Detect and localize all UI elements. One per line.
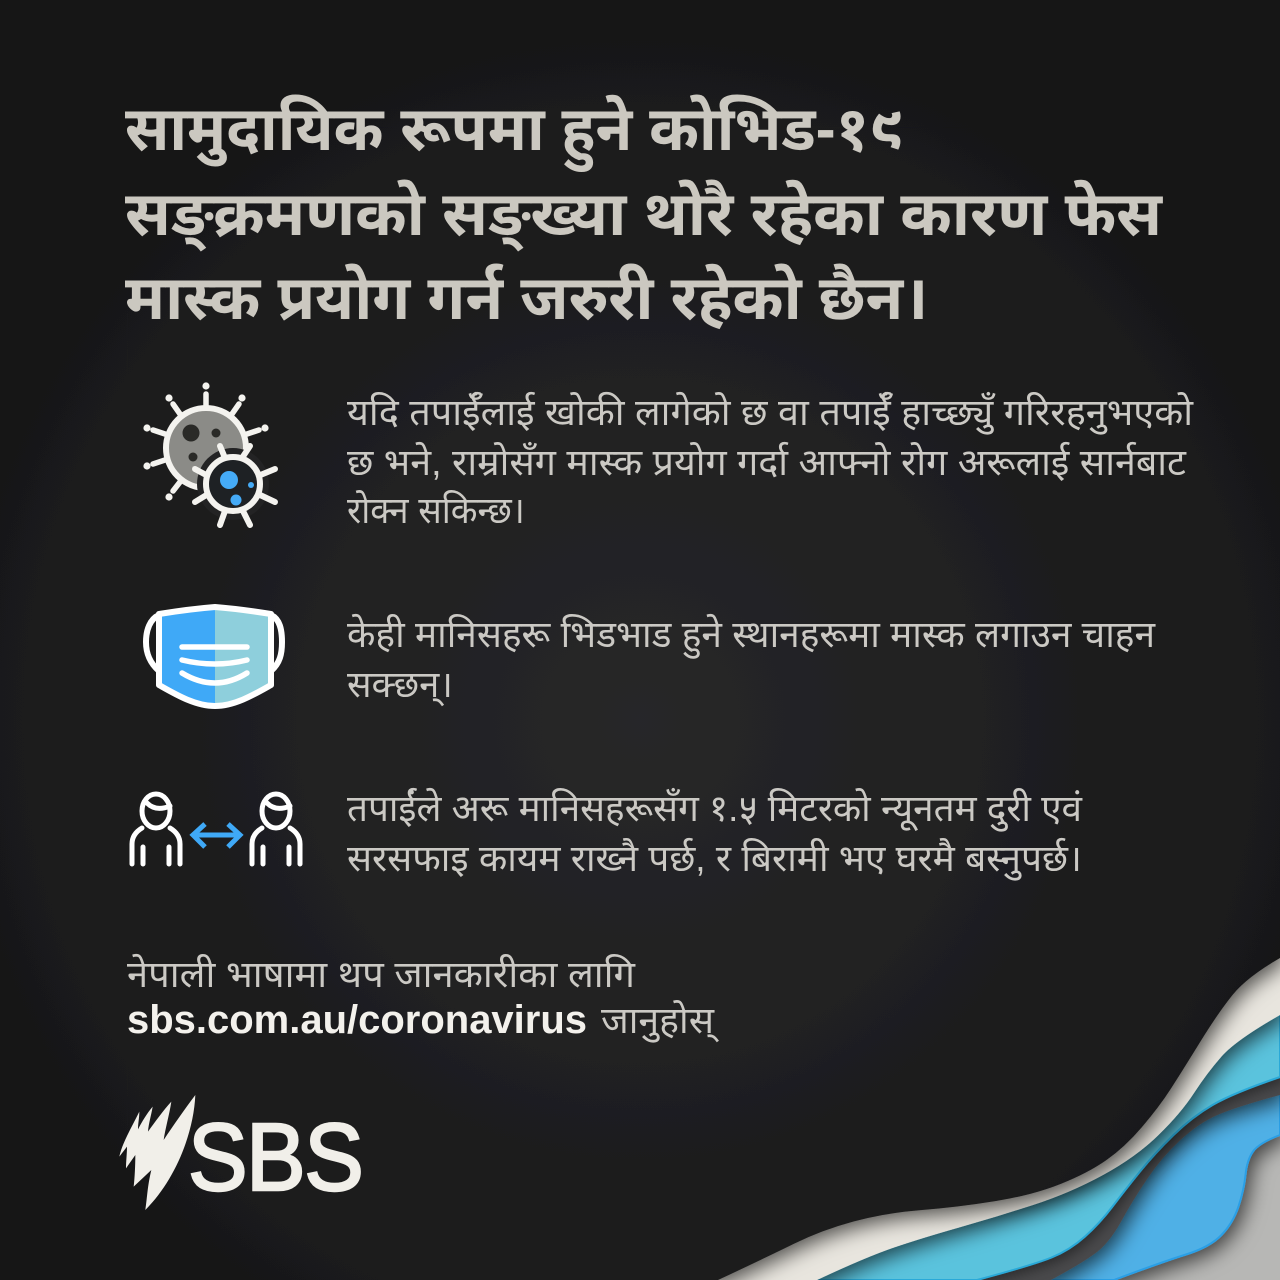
title: मास्क प्रयोग गर्न जरुरी रहेको छैन। xyxy=(125,262,928,333)
icon: two viruses xyxy=(143,382,275,525)
text block: coughing advice: यदि तपाईँलाई खोकी लागेको छ वा तपाईँ हाच्छ्युँ गरिरहनुभएको xyxy=(347,391,1194,435)
text block: coughing advice: छ भने, राम्रोसँग मास्क प्रयोग गर्दा आफ्नो रोग अरूलाई सार्नबाट xyxy=(347,441,1187,483)
text block: distancing and hygiene: सरसफाइ कायम राख्नै पर्छ, र बिरामी भए घरमै बस्नुपर्छ। xyxy=(347,837,1082,881)
icon: face mask xyxy=(146,607,282,708)
text block: crowded places xyxy=(347,614,1156,707)
title: सामुदायिक रूपमा हुने कोभिड-१९ xyxy=(125,93,903,173)
footer: more information: जानुहोस् xyxy=(601,1000,719,1043)
logo: SBS xyxy=(119,1095,362,1211)
text block: distancing and hygiene xyxy=(347,787,1083,881)
icon: two people keeping distance xyxy=(132,794,300,864)
text block: distancing and hygiene: तपाईंले अरू मानिसहरूसँग १.५ मिटरको न्यूनतम दुरी एवं xyxy=(347,787,1083,832)
title: सङ्क्रमणको सङ्ख्या थोरै रहेका कारण फेस xyxy=(125,178,1163,253)
text block: crowded places: सक्छन्। xyxy=(347,664,453,707)
footer: more information: नेपाली भाषामा थप जानकारीका लागि xyxy=(127,954,636,995)
text block: coughing advice: रोक्न सकिन्छ। xyxy=(347,490,525,531)
text block: crowded places: केही मानिसहरू भिडभाड हुने स्थानहरूमा मास्क लगाउन चाहन xyxy=(347,614,1156,659)
logo: SBS: SBS xyxy=(188,1103,362,1211)
title xyxy=(125,93,1163,333)
footer: more information xyxy=(127,954,719,1043)
text block: coughing advice xyxy=(347,391,1194,531)
footer: more information: sbs.com.au/coronavirus xyxy=(127,998,587,1042)
